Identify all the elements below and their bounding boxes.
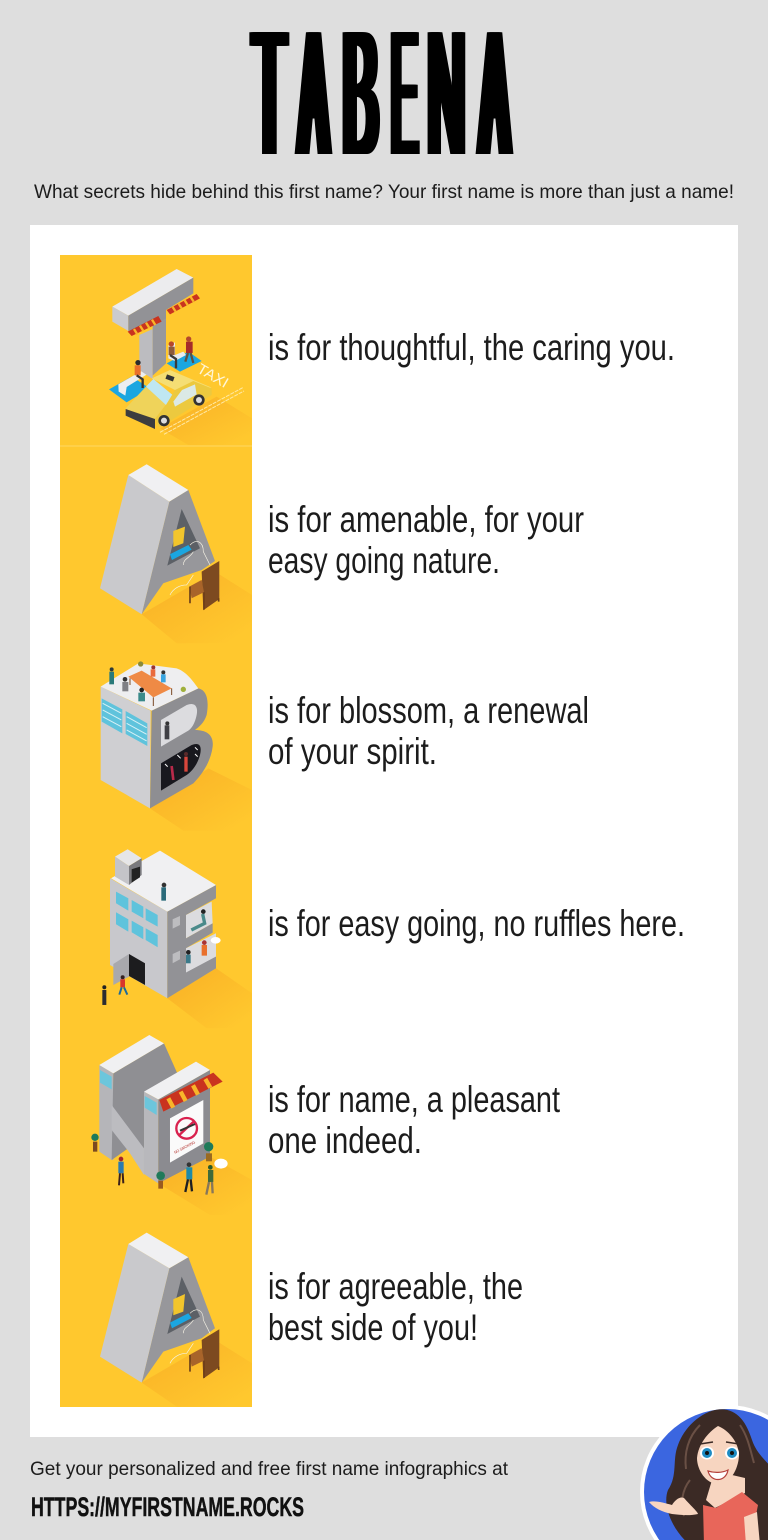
text: A line: easy going nature.: [268, 540, 500, 581]
illustration: letter N with awning: [91, 1035, 252, 1215]
illustration: second letter A with chair: [100, 1233, 252, 1407]
taxi lettering: TAXI: [194, 361, 231, 392]
text: N line: one indeed.: [268, 1120, 422, 1161]
illustration: letter E building: [102, 849, 252, 1028]
text: B line: of your spirit.: [268, 731, 437, 772]
illustration: letter T with taxi: [109, 269, 252, 445]
avatar: woman in blue circle: [640, 1405, 768, 1540]
text: final A line: is for agreeable, the: [268, 1266, 523, 1307]
text: B line: is for blossom, a renewal: [268, 690, 589, 731]
text: A line: is for amenable, for your: [268, 499, 584, 540]
text: final A line: best side of you!: [268, 1307, 478, 1348]
text: A line: [268, 499, 584, 581]
text: N line: is for name, a pleasant: [268, 1079, 561, 1120]
title: [249, 0, 514, 192]
illustration: letter A with chair: [100, 464, 252, 643]
text: final A line: [268, 1266, 523, 1348]
panel: white card: [30, 225, 738, 1437]
text: B line: [268, 690, 589, 772]
no smoking sign caption: NO SMOKING: [173, 1140, 196, 1155]
text: N line: [268, 1079, 561, 1161]
subtitle: What secrets hide behind this first name? Your first name is more than just a name!: [34, 181, 734, 203]
illustration: letter B building: [101, 661, 252, 831]
panel: yellow illustration strip: [60, 255, 252, 1407]
footer prompt: Get your personalized and free first name infographics at: [30, 1458, 509, 1480]
footer url: HTTPS://MYFIRSTNAME.ROCKS: [31, 1492, 304, 1522]
